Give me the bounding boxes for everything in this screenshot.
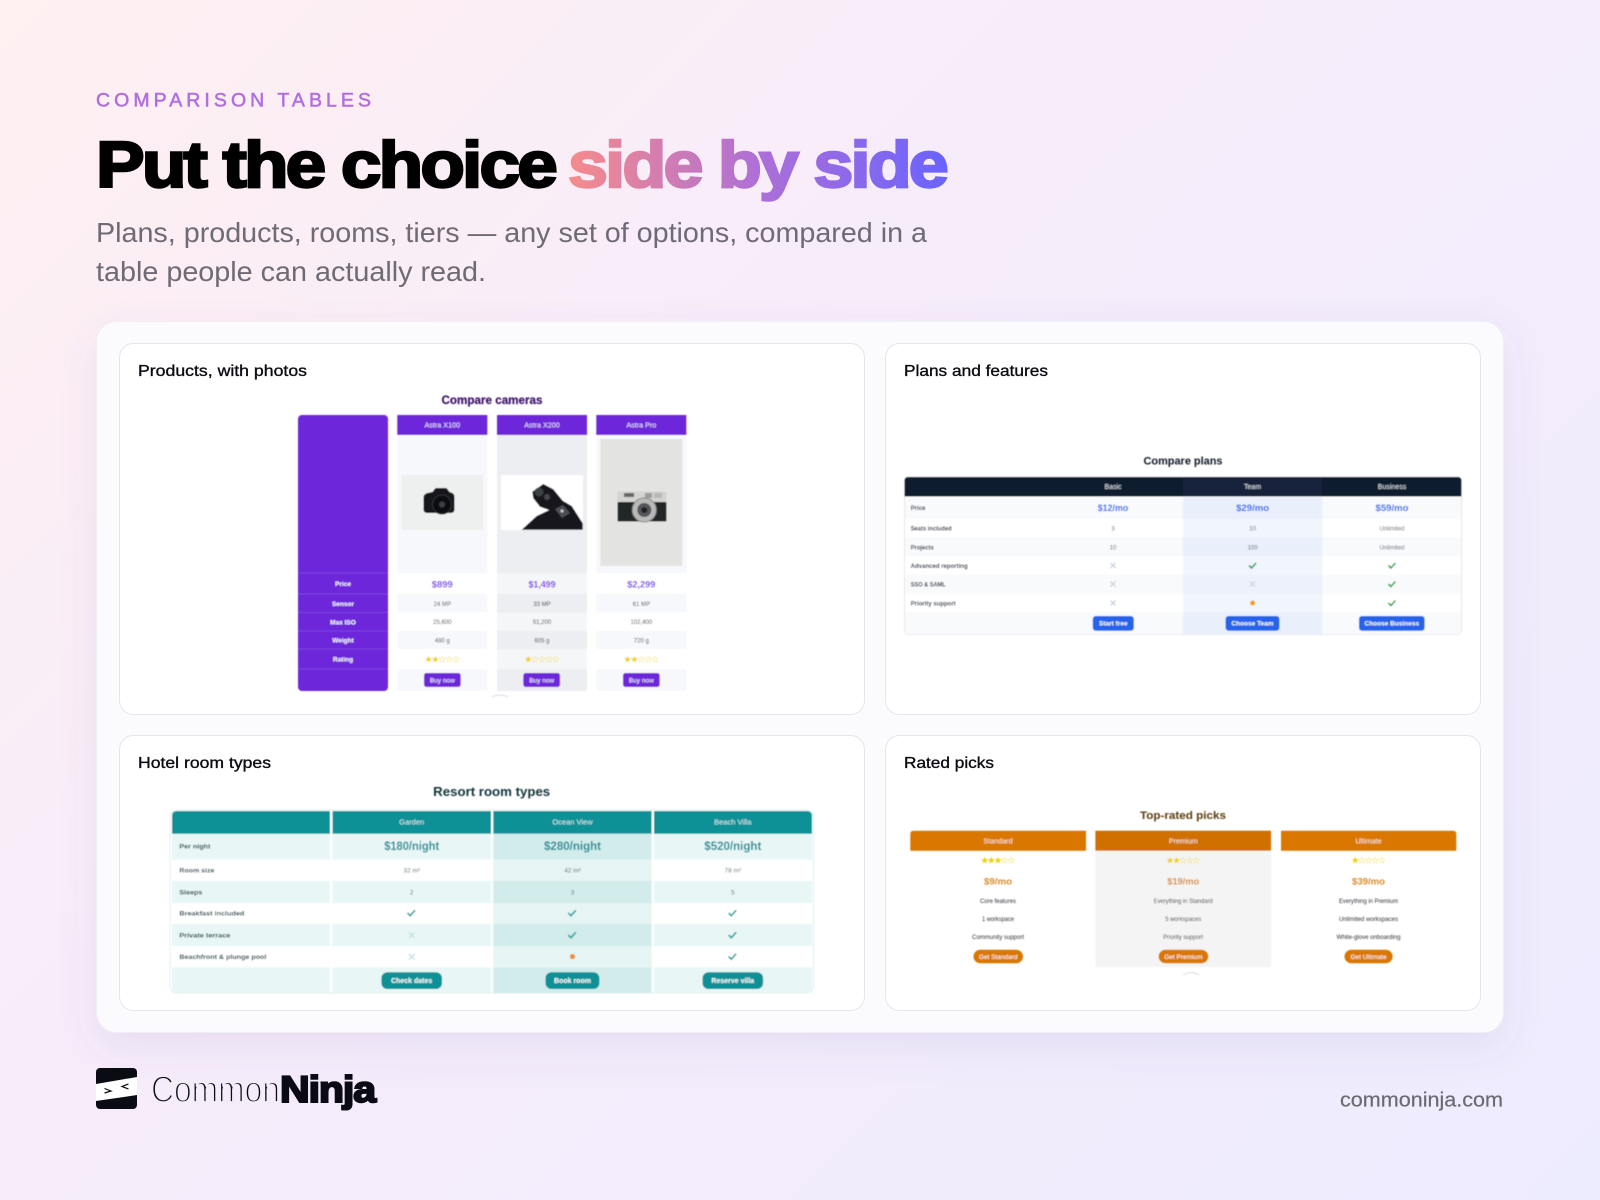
column: Astra X100: Buy now xyxy=(430,677,455,684)
button: choose team xyxy=(1226,616,1279,631)
photo: retro camera xyxy=(600,439,682,566)
button: start free xyxy=(1093,616,1134,631)
button: reserve villa xyxy=(702,972,763,989)
column: premium: $19/mo xyxy=(1167,876,1199,888)
table body: $180/night xyxy=(384,841,439,853)
table title: plans: Compare plans xyxy=(1144,455,1222,467)
table body: Garden xyxy=(399,818,424,827)
icon: ninja mask xyxy=(96,1068,137,1109)
table: compare plans xyxy=(904,455,1462,634)
table body: 32 m² xyxy=(403,868,421,874)
column: Astra X100: 480 g xyxy=(435,638,450,644)
subtitle xyxy=(96,217,927,287)
table title: top-rated: Top-rated picks xyxy=(1140,810,1226,822)
table body: Advanced reporting xyxy=(911,564,968,570)
column: Astra Pro: $2,299 xyxy=(627,580,655,590)
table: compare cameras xyxy=(298,395,686,697)
panel: outer container xyxy=(96,322,1504,1032)
scroll marker xyxy=(1183,972,1199,975)
column: Astra X100: ★★☆☆☆ xyxy=(424,654,460,666)
table title: resort: Resort room types xyxy=(433,784,550,799)
button: book room: Book room xyxy=(554,978,591,985)
label column: Weight xyxy=(332,638,355,644)
button: check dates: Check dates xyxy=(391,978,432,985)
footer url: commoninja.com xyxy=(1340,1089,1503,1112)
column: Astra X200: 51,200 xyxy=(533,620,552,626)
table body xyxy=(170,810,814,993)
column: standard: Get Standard xyxy=(979,954,1018,961)
table body: 78 m² xyxy=(724,868,742,874)
table body: 2 xyxy=(410,890,414,896)
column: Astra Pro: Buy now xyxy=(629,677,654,684)
label column: Max ISO xyxy=(330,620,356,626)
column: ultimate: White-glove onboarding xyxy=(1336,934,1401,941)
column: standard: Standard xyxy=(983,836,1013,846)
button: start free: Start free xyxy=(1099,620,1128,628)
column: Astra X100: 24 MP xyxy=(434,602,451,608)
table body: 3 xyxy=(1111,526,1115,532)
column: ultimate: Ultimate xyxy=(1355,836,1382,846)
column: Astra Pro: 720 g xyxy=(634,638,649,644)
table body: Breakfast included xyxy=(179,910,244,917)
button: reserve villa: Reserve villa xyxy=(711,978,754,985)
table body: Unlimited xyxy=(1379,546,1405,552)
photo: DSLR camera xyxy=(402,475,483,530)
scroll marker xyxy=(492,695,508,697)
table body: 3 xyxy=(571,890,575,896)
table body: Sleeps xyxy=(179,889,203,896)
table body: 5 xyxy=(731,890,735,896)
table body: Price xyxy=(911,506,926,512)
column: Astra Pro: 61 MP xyxy=(633,602,650,608)
wordmark: Ninja xyxy=(280,1069,377,1110)
eyebrow: COMPARISON TABLES xyxy=(96,90,371,112)
panel: plans and features xyxy=(886,344,1480,714)
table title: cameras: Compare cameras xyxy=(442,395,542,407)
table body: Business xyxy=(1378,484,1407,491)
column: premium: Get Premium xyxy=(1164,954,1203,961)
column: ultimate: Everything in Premium xyxy=(1339,898,1398,905)
table: resort room types xyxy=(170,784,814,993)
button: check dates xyxy=(381,972,442,989)
logo: CommonNinja xyxy=(96,1068,377,1110)
column: Astra X200: $1,499 xyxy=(528,580,556,590)
heading: rated: Rated picks xyxy=(904,755,994,772)
table body: Basic xyxy=(1104,484,1122,491)
column: ultimate: ★☆☆☆☆ xyxy=(1351,856,1386,866)
table body: 10 xyxy=(1249,526,1257,532)
title: side by side xyxy=(568,128,946,201)
column: standard xyxy=(910,831,1086,963)
table body: $12/mo xyxy=(1098,503,1128,514)
column: premium: 5 workspaces xyxy=(1165,916,1201,923)
table body: Beach Villa xyxy=(714,818,752,827)
table body: Private terrace xyxy=(179,932,231,939)
table body: Ocean View xyxy=(552,818,593,827)
column: Astra X200 xyxy=(497,415,587,691)
column: Astra Pro xyxy=(596,415,686,691)
button: book room xyxy=(546,972,599,989)
subtitle: Plans, products, rooms, tiers — any set of options, compared in a xyxy=(96,217,927,248)
label column: Rating xyxy=(333,656,353,664)
wordmark xyxy=(151,1069,377,1110)
wordmark: Common xyxy=(151,1069,280,1110)
heading: products: Products, with photos xyxy=(138,363,307,380)
title xyxy=(96,128,946,201)
subtitle: table people can actually read. xyxy=(96,256,486,287)
title: Put the choice xyxy=(96,128,555,201)
column: ultimate: $39/mo xyxy=(1352,876,1385,888)
table body: 100 xyxy=(1248,546,1258,552)
table body: Priority support xyxy=(911,602,956,608)
button: choose business xyxy=(1359,616,1425,631)
table body: 42 m² xyxy=(564,868,582,874)
panel: products with photos xyxy=(120,344,864,714)
column: Astra X100: $899 xyxy=(432,580,453,590)
column: Astra X200: 33 MP xyxy=(533,602,551,608)
heading: plans: Plans and features xyxy=(904,363,1048,380)
table body: Seats included xyxy=(911,526,952,532)
table body: Team xyxy=(1244,484,1261,491)
table body: $29/mo xyxy=(1236,503,1269,514)
table body: Per night xyxy=(179,843,211,850)
table body xyxy=(904,477,1462,634)
column: standard: Community support xyxy=(972,934,1024,941)
column: Astra X200: ★☆☆☆☆ xyxy=(524,654,560,666)
label column: Price xyxy=(335,581,351,588)
column: Astra Pro: 102,400 xyxy=(630,620,653,626)
label column: Sensor xyxy=(332,601,354,608)
column: premium: Everything in Standard xyxy=(1154,898,1213,905)
column: Astra X100 xyxy=(397,415,487,691)
column: standard: 1 workspace xyxy=(982,916,1015,923)
button: choose business: Choose Business xyxy=(1365,620,1419,628)
column: Astra X200: Buy now xyxy=(529,677,554,684)
table body: Room size xyxy=(179,867,215,874)
label column xyxy=(298,415,388,691)
column: Astra Pro: ★★☆☆☆ xyxy=(623,654,659,666)
column: ultimate: Unlimited workspaces xyxy=(1339,916,1398,923)
table body: $520/night xyxy=(704,841,761,853)
column: premium: Premium xyxy=(1169,836,1198,846)
table body: SSO & SAML xyxy=(911,582,946,588)
column: premium: ★★☆☆☆ xyxy=(1166,856,1201,866)
column: premium: Priority support xyxy=(1163,934,1203,941)
table body: $280/night xyxy=(544,841,601,853)
column: Astra X200: Astra X200 xyxy=(524,420,560,430)
panel: hotel room types xyxy=(120,736,864,1010)
photo: camera top view xyxy=(501,475,583,530)
table body: $59/mo xyxy=(1376,503,1409,514)
button: choose team: Choose Team xyxy=(1231,620,1274,628)
column: premium xyxy=(1095,831,1271,967)
table body: Projects xyxy=(911,546,934,552)
column: standard: ★★★☆☆ xyxy=(980,856,1016,866)
table body: Beachfront & plunge pool xyxy=(179,954,267,961)
column: standard: $9/mo xyxy=(984,876,1012,888)
column: ultimate xyxy=(1281,831,1456,963)
heading: hotel: Hotel room types xyxy=(138,755,271,772)
column: Astra X100: 25,600 xyxy=(433,620,452,626)
column: Astra X200: 605 g xyxy=(534,638,550,644)
table: top-rated picks xyxy=(910,810,1456,975)
panel: rated picks xyxy=(886,736,1480,1010)
column: Astra Pro: Astra Pro xyxy=(626,420,656,430)
column: Astra X100: Astra X100 xyxy=(425,420,460,430)
column: ultimate: Get Ultimate xyxy=(1350,954,1387,961)
column: standard: Core features xyxy=(980,898,1016,905)
table body: 10 xyxy=(1110,546,1117,552)
table body: Unlimited xyxy=(1379,526,1405,532)
